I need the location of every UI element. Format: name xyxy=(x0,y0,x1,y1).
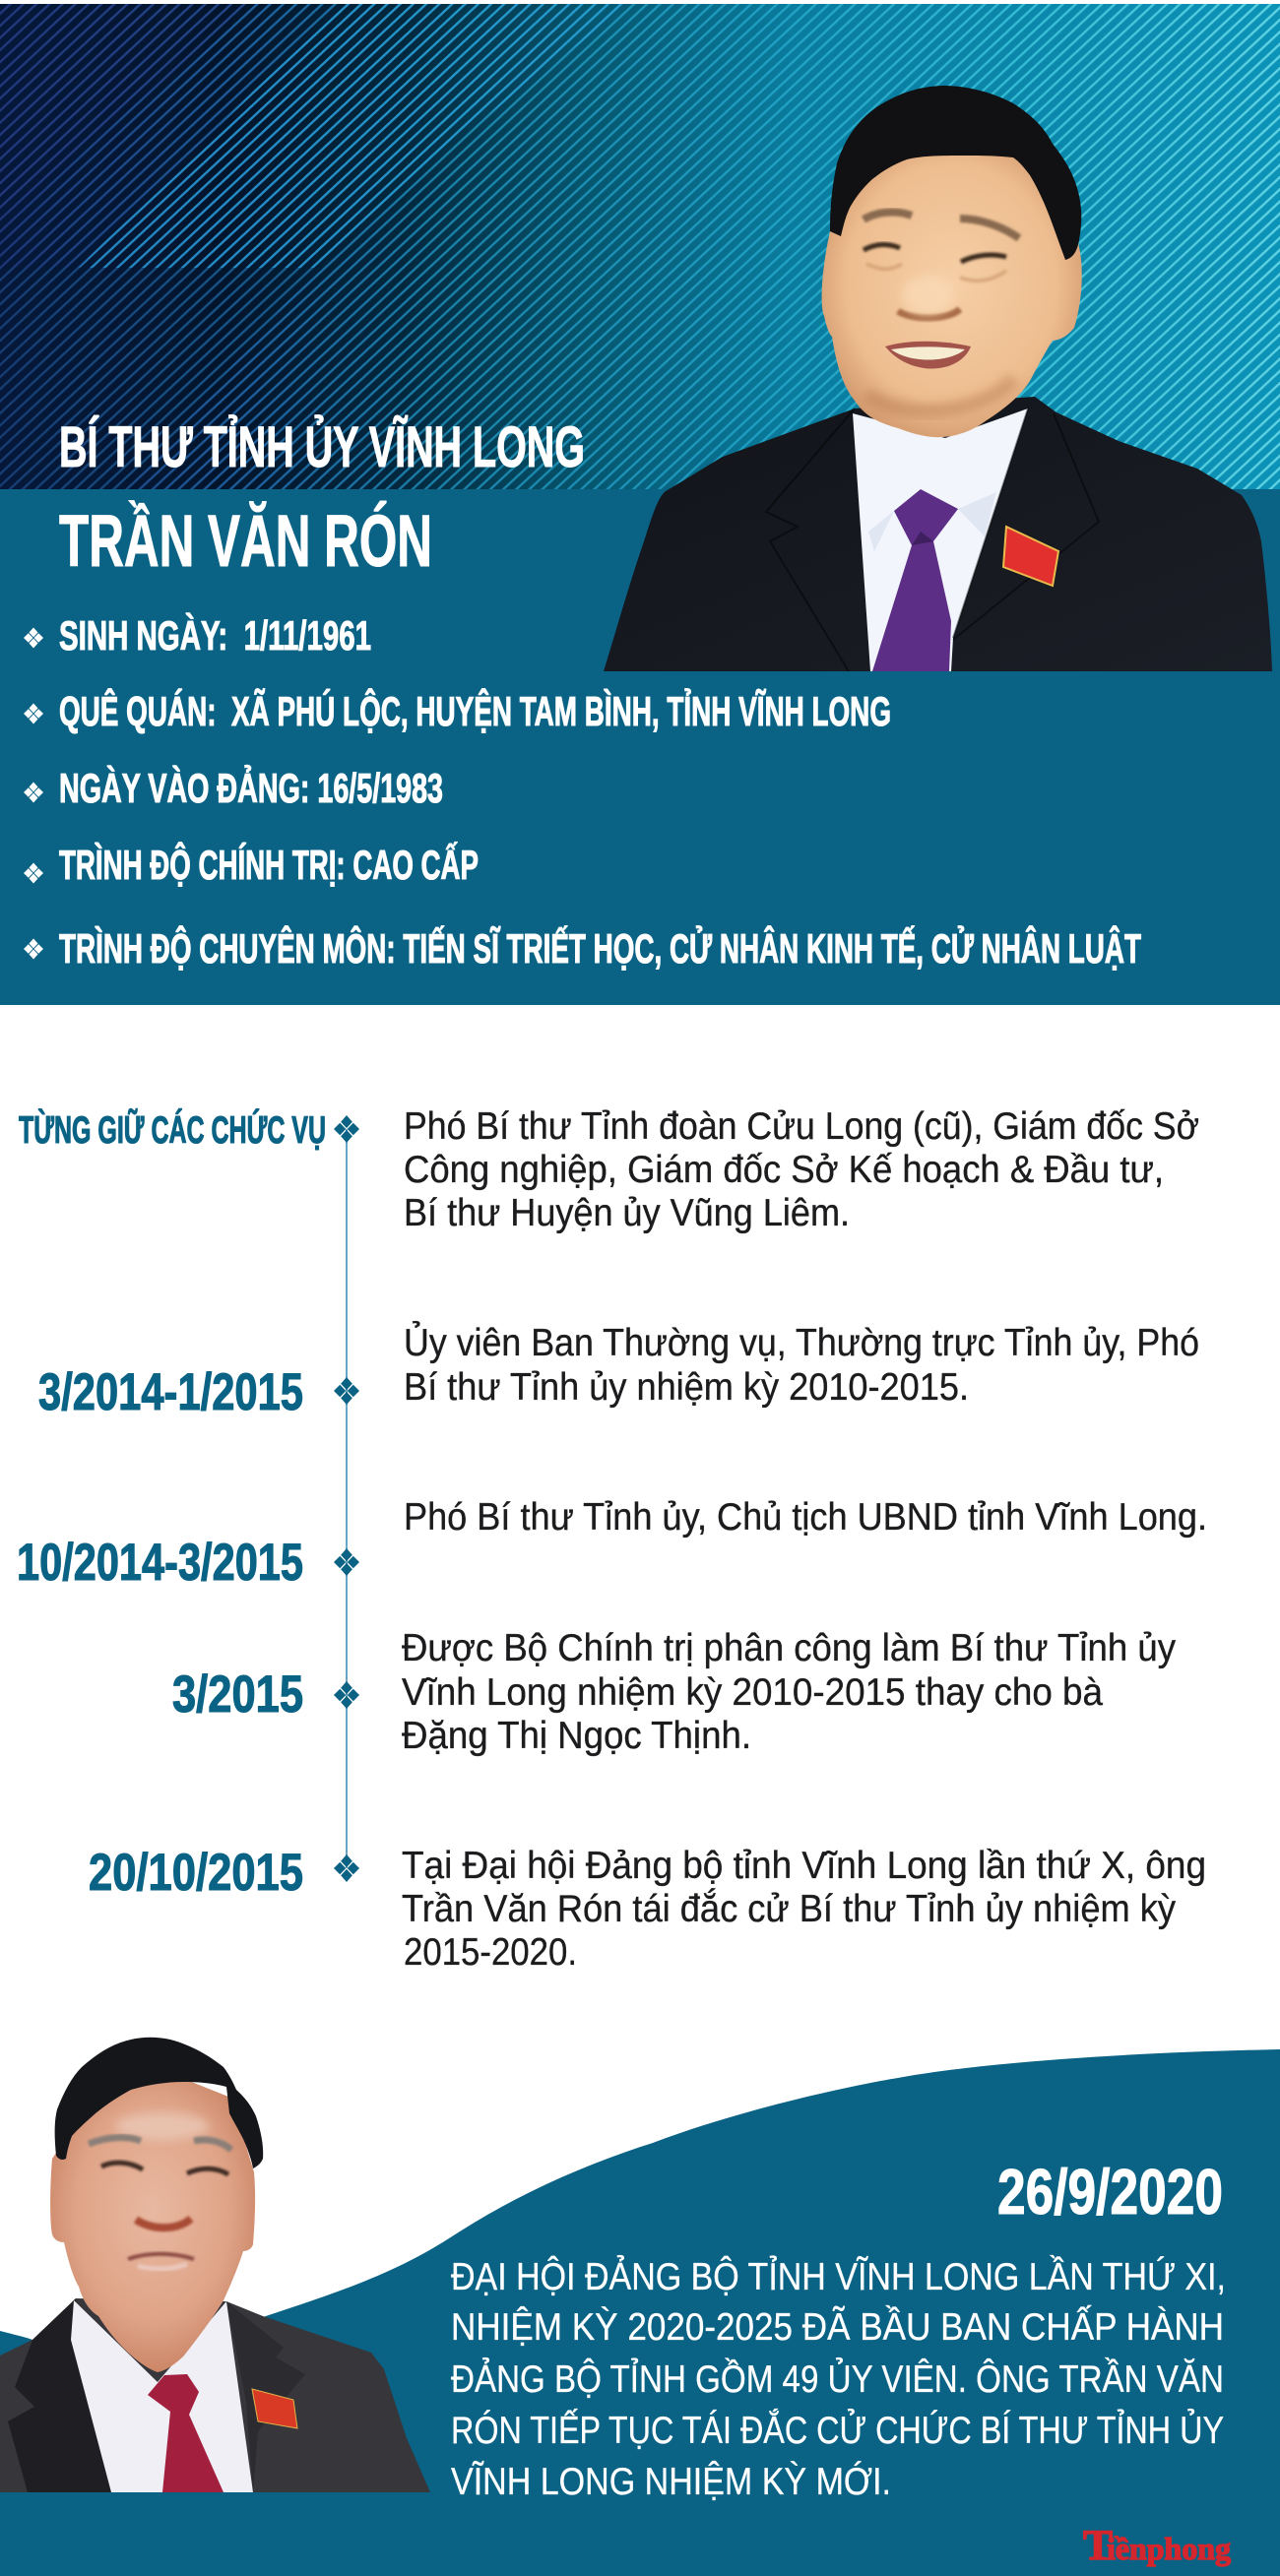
suit xyxy=(0,2298,430,2492)
right lapel xyxy=(226,2301,305,2492)
tie knot shadow xyxy=(912,532,933,545)
home town: QUÊ QUÁN: XÃ PHÚ LỘC, HUYỆN TAM BÌNH, TỈNH VĨNH LONG xyxy=(59,687,891,734)
text: 3/2014-1/2015: Bí thư Tỉnh ủy nhiệm kỳ 2010-2015. xyxy=(404,1366,969,1409)
date: 10/2014-3/2015: 10/2014-3/2015 xyxy=(17,1534,303,1592)
text: 3/2014-1/2015: Ủy viên Ban Thường vụ, Thường trực Tỉnh ủy, Phó xyxy=(404,1321,1199,1364)
neck and face xyxy=(50,2079,255,2372)
forehead highlight xyxy=(115,2112,210,2140)
lapel seams xyxy=(766,408,1099,671)
text: congress summary: VĨNH LONG NHIỆM KỲ MỚI. xyxy=(451,2461,891,2503)
text: congress summary xyxy=(451,2255,1226,2503)
header background: diagonal stripes xyxy=(0,4,1280,489)
party date: NGÀY VÀO ĐẢNG: 16/5/1983 xyxy=(59,764,443,811)
date: 26/9/2020: 26/9/2020 xyxy=(997,2156,1223,2228)
heading: past positions: TỪNG GIỮ CÁC CHỨC VỤ xyxy=(19,1108,326,1152)
portrait: main photo xyxy=(604,86,1272,671)
left jacket shadow xyxy=(8,2298,111,2492)
text: 3/2015: Được Bộ Chính trị phân công làm Bí thư Tỉnh ủy xyxy=(402,1627,1176,1669)
political level: TRÌNH ĐỘ CHÍNH TRỊ: CAO CẤP xyxy=(59,841,479,888)
hair xyxy=(55,2038,263,2168)
marker: 20/10/2015 xyxy=(334,1854,359,1882)
hair xyxy=(830,86,1081,260)
text: 20/10/2015: Trần Văn Rón tái đắc cử Bí thư Tỉnh ủy nhiệm kỳ xyxy=(402,1888,1176,1930)
tie xyxy=(872,489,958,671)
panel: bottom wave xyxy=(0,2049,1280,2576)
text: 3/2015 xyxy=(402,1627,1176,1757)
facial features xyxy=(864,213,1019,410)
party pin xyxy=(252,2389,297,2428)
marker: past positions xyxy=(334,1115,359,1143)
text: 3/2014-1/2015 xyxy=(404,1321,1199,1409)
bullet: expertise xyxy=(24,939,43,959)
biography list xyxy=(24,612,1141,972)
bullet: party date xyxy=(24,782,43,803)
birth date: SINH NGÀY: 1/11/1961 xyxy=(59,612,371,659)
shirt xyxy=(71,2300,253,2492)
heading: position: BÍ THƯ TỈNH ỦY VĨNH LONG xyxy=(59,415,585,479)
timeline axis xyxy=(346,1129,348,1868)
panel: biography band xyxy=(0,489,1280,1005)
bullet: political level xyxy=(24,862,43,884)
logo: Tiền phong: T xyxy=(1083,2523,1113,2569)
collar shadow xyxy=(868,492,996,551)
text: 20/10/2015 xyxy=(402,1845,1206,1974)
portrait: lower photo xyxy=(0,2038,430,2492)
text: 20/10/2015: 2015-2020. xyxy=(404,1931,577,1974)
date: 3/2014-1/2015: 3/2014-1/2015 xyxy=(38,1363,303,1421)
bullet: home town xyxy=(24,703,43,724)
text: 10/2014-3/2015: Phó Bí thư Tỉnh ủy, Chủ tịch UBND tỉnh Vĩnh Long. xyxy=(404,1496,1207,1539)
text: past positions: Phó Bí thư Tỉnh đoàn Cửu Long (cũ), Giám đốc Sở xyxy=(404,1105,1199,1148)
text: past positions: Bí thư Huyện ủy Vũng Liêm. xyxy=(404,1192,850,1234)
tie xyxy=(148,2374,224,2492)
suit xyxy=(604,397,1272,671)
date: 20/10/2015: 20/10/2015 xyxy=(89,1844,303,1902)
text: 3/2015: Đặng Thị Ngọc Thịnh. xyxy=(402,1715,751,1757)
text: past positions xyxy=(404,1105,1199,1234)
marker: 10/2014-3/2015 xyxy=(334,1548,359,1576)
text: 3/2015: Vĩnh Long nhiệm kỳ 2010-2015 thay cho bà xyxy=(402,1671,1103,1714)
facial features xyxy=(89,2138,231,2269)
marker: 3/2014-1/2015 xyxy=(334,1377,359,1405)
timeline xyxy=(17,1105,1207,1974)
text: 20/10/2015: Tại Đại hội Đảng bộ tỉnh Vĩnh Long lần thứ X, ông xyxy=(402,1845,1206,1887)
logo: Tiền phong: iềnphong xyxy=(1107,2531,1231,2566)
bullet: birth date xyxy=(24,628,43,648)
text: past positions: Công nghiệp, Giám đốc Sở Kế hoạch & Đầu tư, xyxy=(404,1149,1164,1191)
marker: 3/2015 xyxy=(334,1681,359,1709)
shirt xyxy=(853,408,1028,671)
date: 3/2015: 3/2015 xyxy=(172,1665,303,1724)
logo: Tiền phong xyxy=(1083,2523,1231,2569)
party pin xyxy=(1003,527,1058,586)
heading: name: TRẦN VĂN RÓN xyxy=(59,500,432,582)
face xyxy=(822,142,1082,437)
